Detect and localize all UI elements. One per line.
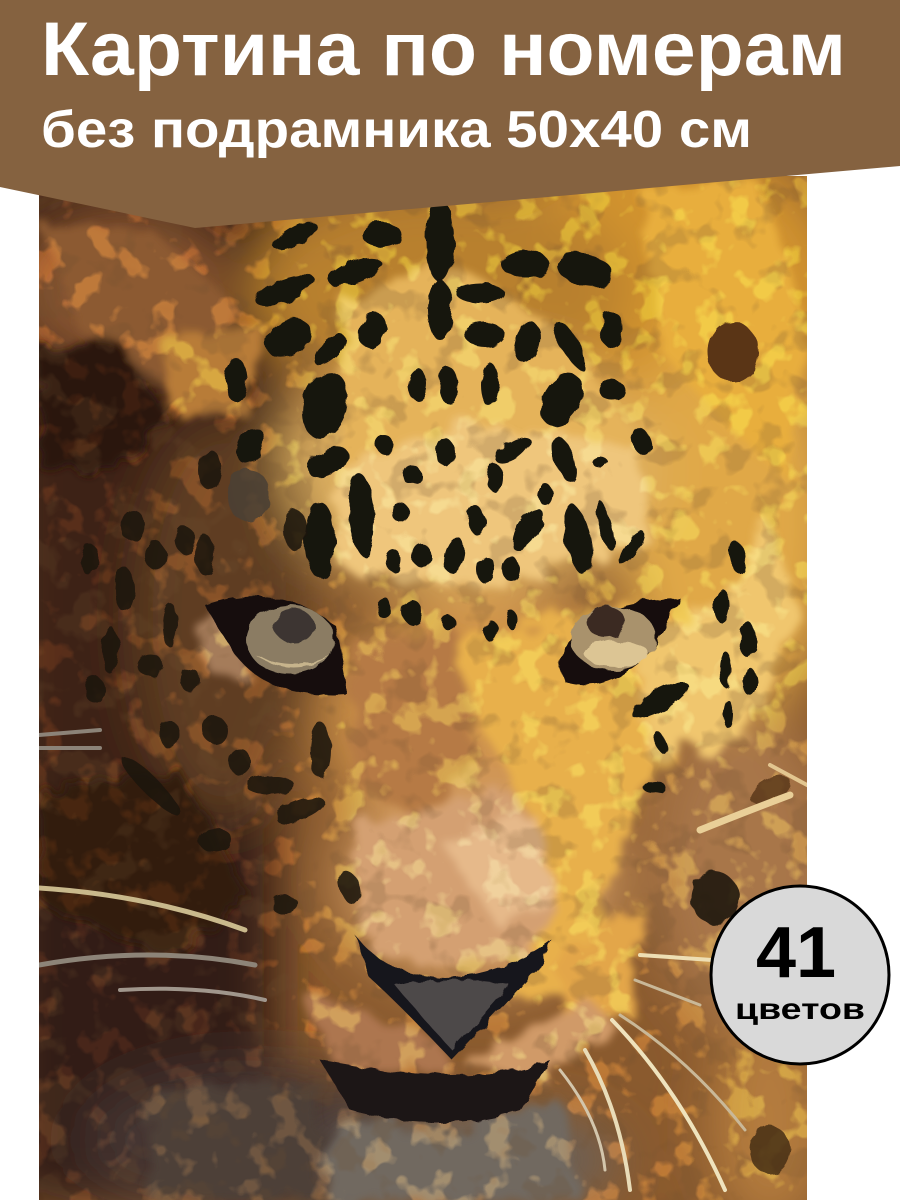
painting: leopard portrait [39,176,807,1200]
badge: 41 colours [711,886,889,1064]
subtitle: без подрамника 50х40 см [41,101,752,159]
title: Картина по номерам [41,7,846,92]
painterly mottling [39,176,807,1200]
nose and mouth [320,935,552,1122]
whiskers [39,730,807,1190]
badge: 41 colours: цветов [735,993,865,1026]
painting background tones [39,176,807,1200]
face highlights [39,180,807,1200]
header banner [0,0,900,228]
dark spots: left cheek [81,450,794,1174]
badge: 41 colours: 41 [756,913,836,993]
left eye [205,596,348,695]
dark spots: forehead and cheeks [225,198,758,795]
right eye [560,598,680,685]
